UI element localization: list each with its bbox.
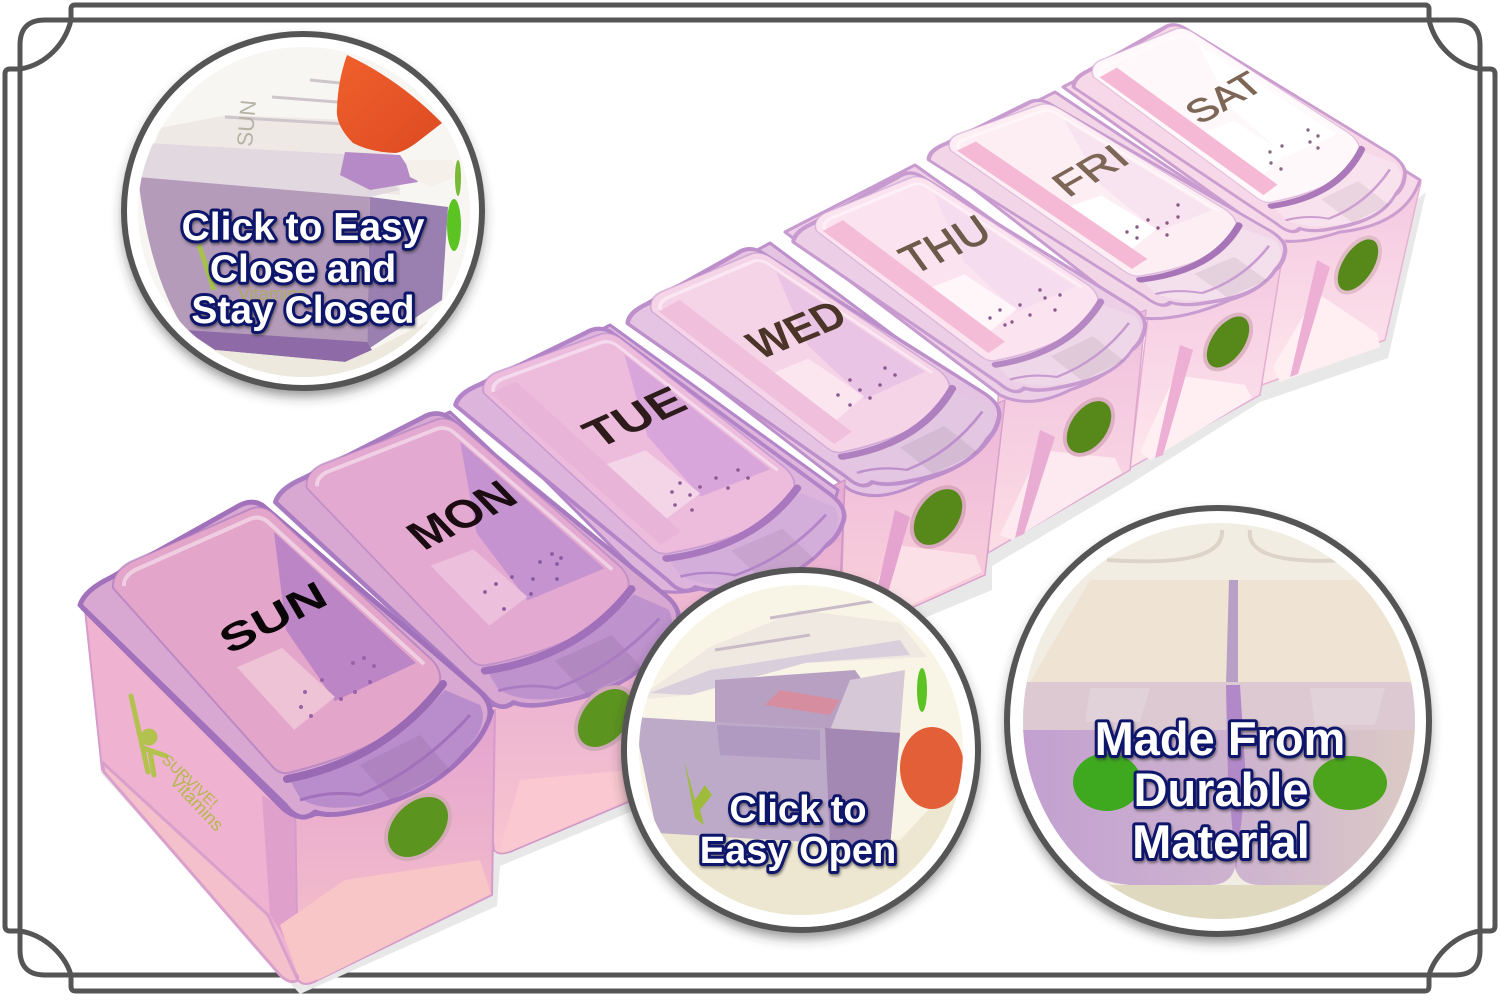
THU button [1052,387,1126,467]
compartment: SAT [1047,20,1431,385]
THU lid [772,171,1166,394]
logo: star figure [131,696,166,775]
faint logo text: Vitamins [238,284,307,304]
caption: Easy Open [700,830,896,872]
WED button [898,475,978,559]
photo: opening the lid [630,580,975,920]
caption: Click to Easy [182,206,425,249]
logo: text: Vitamins [166,771,228,835]
WED front face [840,400,1005,640]
photo: closing the lid [130,40,480,385]
faint SUN on lid: SUN [232,99,261,147]
callout: Made From Durable Material [1006,508,1430,942]
caption: Material [1132,815,1310,868]
caption: Durable [1134,763,1308,816]
WED label: WED [738,292,856,367]
TUE braille dots [670,468,750,512]
THU label: THU [891,207,1000,283]
WED lid [605,247,1022,488]
TUE front face [650,480,845,745]
SAT button [1324,227,1392,303]
compartment: MON [270,407,684,854]
TUE rim [465,325,838,592]
compartment: SUN [80,502,495,984]
green buttons [1073,753,1141,811]
SUN label: SUN [211,572,334,662]
SUN button [371,780,465,874]
SAT label: SAT [1177,66,1272,131]
MON lid [270,407,684,714]
SUN lid [80,502,490,817]
MON rim [283,412,660,706]
SAT rim [1063,28,1420,241]
SUN braille dots [299,656,376,718]
photo: compartment closeup [1015,520,1425,925]
FRI label: FRI [1043,138,1138,204]
caption: Stay Closed [191,289,415,332]
WED braille dots [836,366,897,407]
THU rim [785,165,1140,401]
caption: Close and [210,248,396,291]
SAT braille dots [1268,128,1320,171]
MON braille dots [483,552,563,611]
FRI lid [902,94,1312,312]
caption [1095,712,1345,868]
compartment: THU [772,165,1166,553]
caption: Click to [729,789,867,831]
logo: text: SURVIVE! [158,751,221,811]
MON button [561,673,649,763]
SAT front face [1262,172,1421,385]
caption [182,206,425,332]
SAT lid [1047,20,1431,237]
MON label: MON [396,472,527,558]
tomato fingertip [337,55,442,153]
WED rim [630,243,1000,496]
SUN rim [84,505,490,815]
FRI rim [930,92,1285,319]
TUE label: TUE [573,378,696,456]
compartment: FRI [902,92,1312,468]
callout: Click to Easy Open [622,570,980,938]
cast shadow [100,192,1426,994]
FRI braille dots [1125,203,1180,240]
FRI front face [1130,240,1285,468]
caption [700,789,896,872]
SUN front face [295,710,495,984]
compartment: TUE [443,321,857,745]
MON front face [481,610,655,854]
THU front face [988,310,1146,553]
SUN side face with logo [84,600,298,982]
callout: Click to Easy Close and Stay Closed [123,34,483,396]
THU braille dots [988,288,1062,327]
SUN face lower highlight [280,860,491,980]
FRI button [1193,303,1263,381]
caption: Made From [1095,712,1345,765]
logo: text [158,751,228,835]
TUE lid [443,321,857,600]
compartment: WED [605,243,1022,640]
